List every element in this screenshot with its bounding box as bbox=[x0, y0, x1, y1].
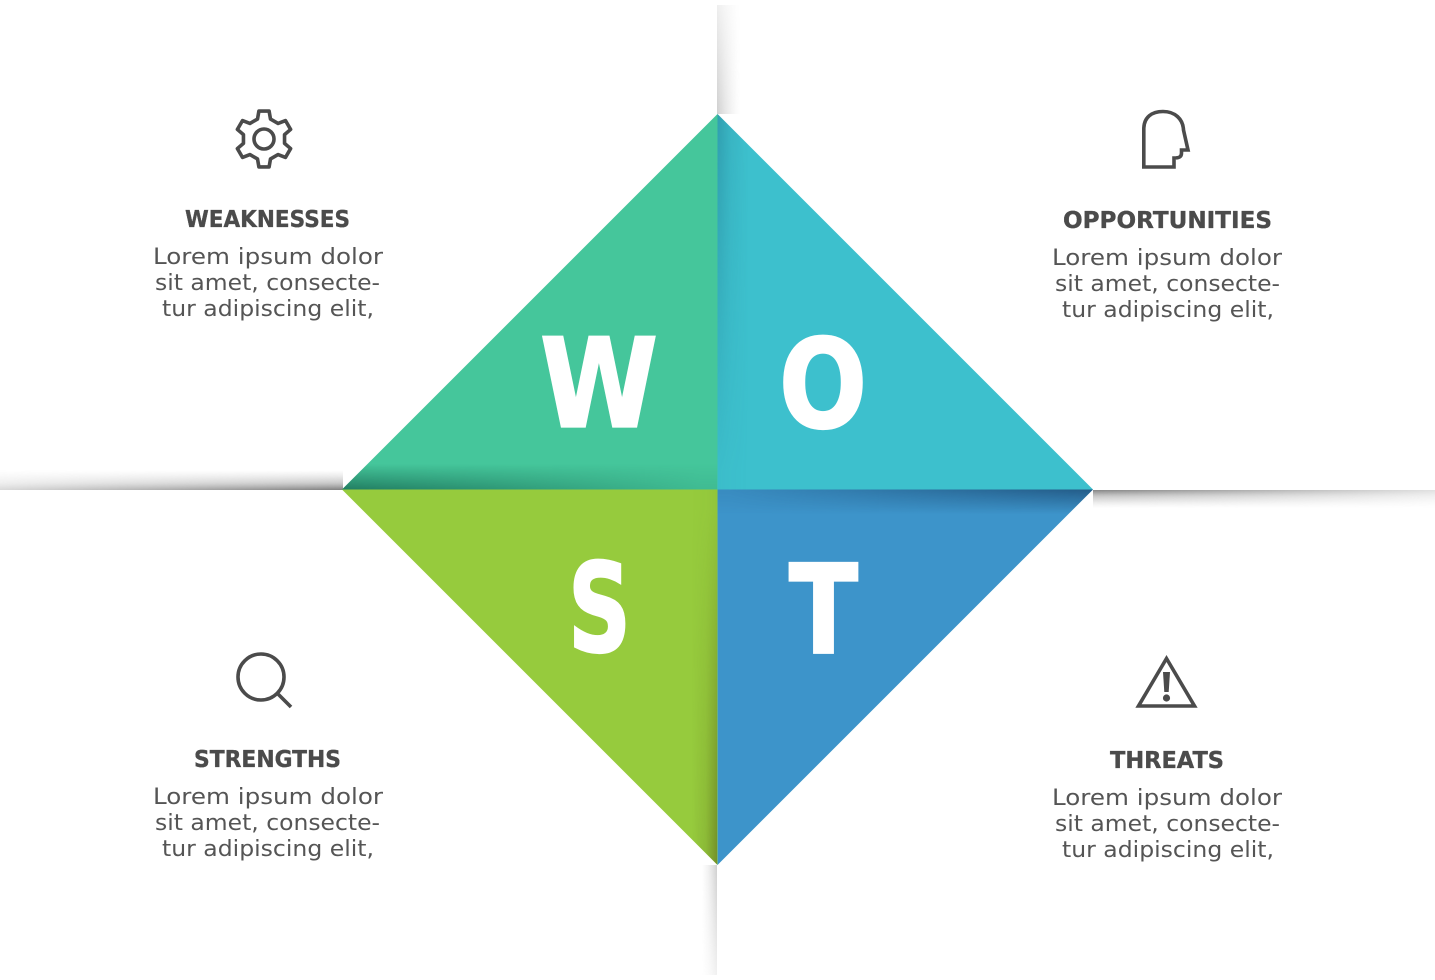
quadrant: S lime triangle bbox=[342, 490, 718, 865]
fold shadow: right bbox=[1093, 490, 1435, 506]
icon: magnifier bbox=[238, 654, 291, 707]
quadrant: T blue triangle bbox=[718, 490, 1093, 865]
text block: strengths bbox=[153, 784, 384, 862]
panel: opportunities bbox=[1052, 112, 1283, 323]
letter O: O bbox=[779, 314, 867, 458]
heading: strengths: STRENGTHS bbox=[194, 747, 341, 773]
heading: threats: THREATS bbox=[1110, 748, 1224, 774]
text block: weaknesses: tur adipiscing elit, bbox=[162, 296, 374, 322]
text block: strengths: sit amet, consecte- bbox=[155, 810, 380, 836]
letter W: W bbox=[540, 314, 658, 456]
heading: weaknesses: WEAKNESSES bbox=[185, 207, 350, 233]
panel: threats bbox=[1052, 658, 1283, 863]
quadrant: O teal triangle bbox=[718, 114, 1093, 490]
fold shadow: bottom bbox=[706, 865, 717, 975]
text block: opportunities: sit amet, consecte- bbox=[1055, 271, 1280, 297]
text block: weaknesses: Lorem ipsum dolor bbox=[153, 244, 384, 270]
text block: threats: Lorem ipsum dolor bbox=[1052, 785, 1283, 811]
fold shadow: left bbox=[0, 473, 343, 490]
text block: threats bbox=[1052, 785, 1283, 863]
text block: opportunities: tur adipiscing elit, bbox=[1062, 297, 1274, 323]
letter T: T bbox=[789, 540, 858, 683]
fold shadow: top bbox=[717, 5, 734, 114]
heading: opportunities: OPPORTUNITIES bbox=[1063, 208, 1272, 234]
text block: strengths: tur adipiscing elit, bbox=[162, 836, 374, 862]
text block: threats: tur adipiscing elit, bbox=[1062, 837, 1274, 863]
central diamond bbox=[342, 114, 1093, 865]
panel: strengths bbox=[153, 654, 384, 862]
icon: head bbox=[1144, 112, 1188, 167]
letter S: S bbox=[568, 538, 631, 682]
text block: strengths: Lorem ipsum dolor bbox=[153, 784, 384, 810]
text block: opportunities bbox=[1052, 245, 1283, 323]
text block: opportunities: Lorem ipsum dolor bbox=[1052, 245, 1283, 271]
quadrant: W green triangle bbox=[342, 114, 718, 490]
text block: weaknesses bbox=[153, 244, 384, 322]
icon: warning triangle bbox=[1138, 658, 1194, 706]
text block: threats: sit amet, consecte- bbox=[1055, 811, 1280, 837]
panel: weaknesses bbox=[153, 111, 384, 322]
text block: weaknesses: sit amet, consecte- bbox=[155, 270, 380, 296]
icon: gear bbox=[237, 111, 291, 167]
